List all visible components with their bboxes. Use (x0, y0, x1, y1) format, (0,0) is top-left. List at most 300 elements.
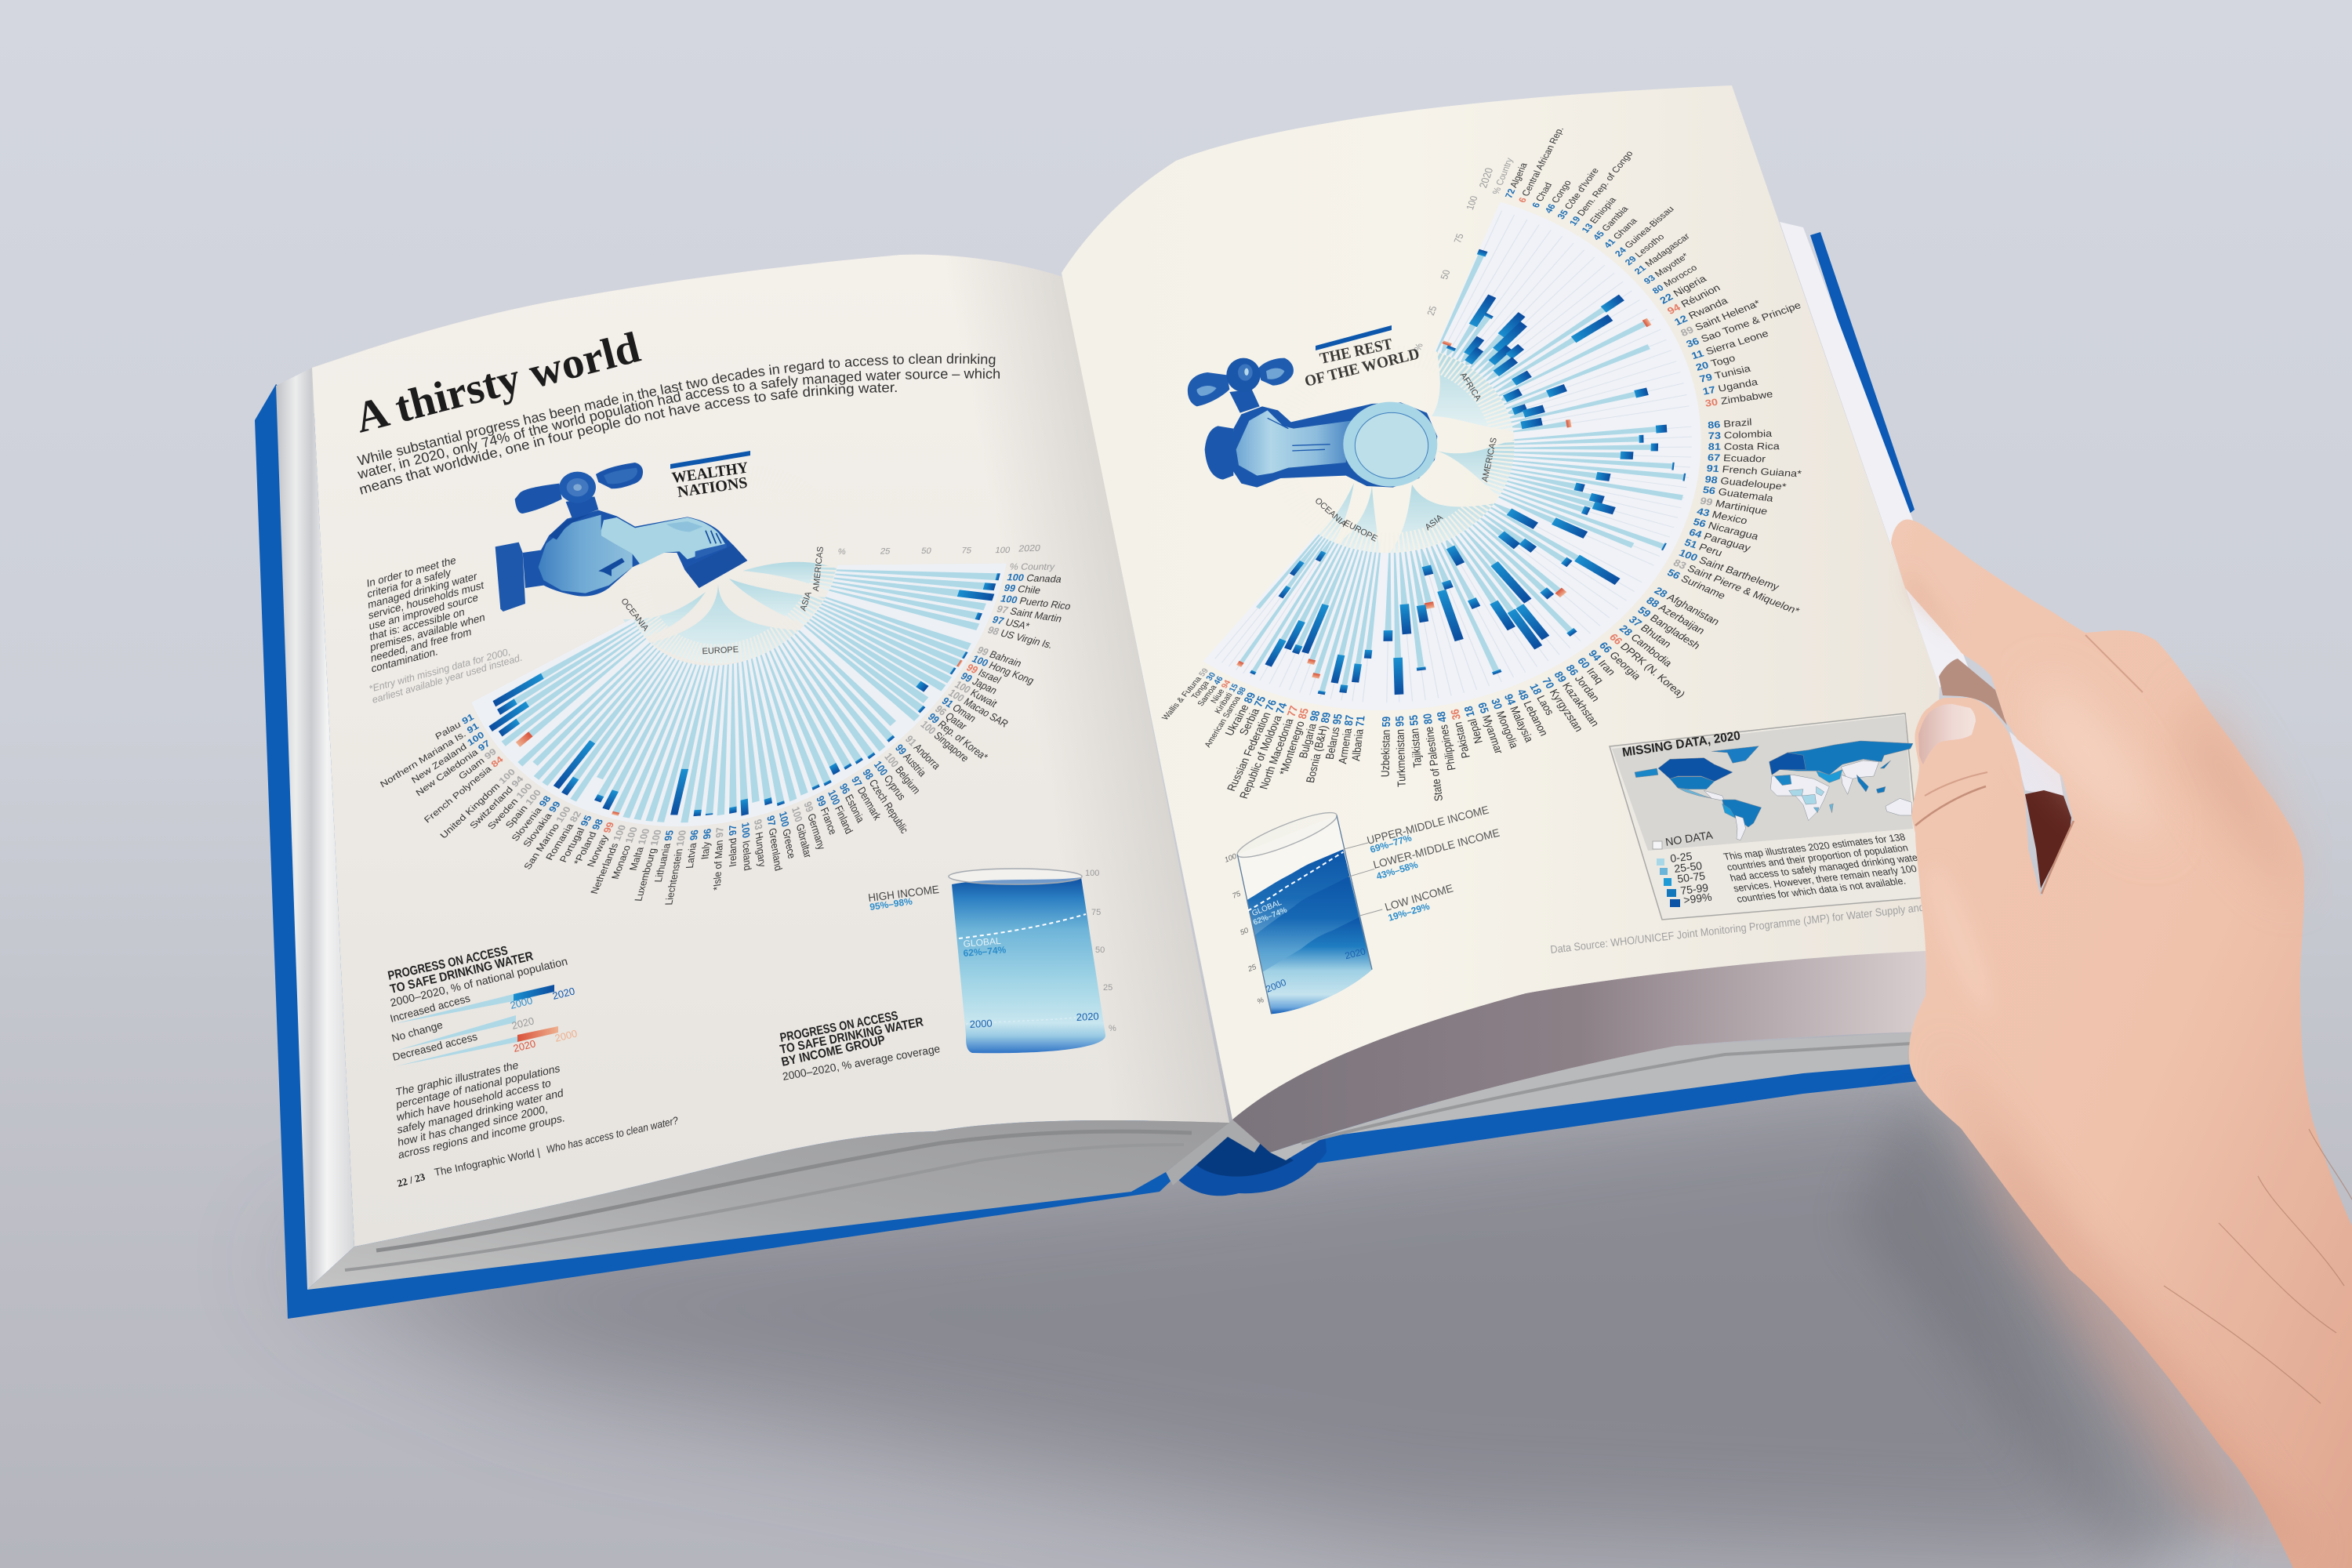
bars: Africa: 20 Togo (1694, 352, 1737, 373)
region labels (1313, 371, 1499, 544)
bars: Americas (816, 554, 1080, 661)
income labels: 43%–58% (1375, 859, 1420, 882)
bars: Asia: 65 Myanmar (1475, 701, 1505, 756)
bars: Africa: 6 Central African Rep. (1517, 125, 1566, 204)
bars: Asia: Turkmenistan 95 (1393, 715, 1408, 787)
left page gutter shade (312, 255, 1229, 1247)
branch tents (623, 562, 837, 663)
map note: had access to safely managed drinking water (1729, 851, 1922, 884)
left page stack edge (276, 368, 354, 1290)
bars: Americas: 100 Puerto Rico (999, 593, 1073, 612)
heading: progress by income group: BY INCOME GROUP (780, 1033, 887, 1069)
bars: Asia: 88 Azerbaijan (1644, 595, 1708, 637)
bars: Americas: 86 Brazil (1708, 416, 1752, 430)
intro text: While substantial progress has been made in the last two decades in regard to access to clean drinking (357, 353, 996, 466)
branch tents (1319, 352, 1515, 553)
bars: Europe: Sweden 100 (486, 782, 535, 831)
glass chart: high income: 75 (1091, 908, 1101, 917)
bars: Americas: 43 Mexico (1696, 506, 1749, 526)
faucet mouth (1343, 402, 1437, 487)
bars: Europe: 96 Estonia (837, 782, 866, 826)
bars: Europe: Serbia 75 (1237, 694, 1269, 737)
gap between thumb and palm (2025, 790, 2071, 888)
map legend: >99% (1682, 891, 1712, 906)
right page (1062, 85, 1940, 1120)
heading: the rest of the world: OF THE WORLD (1303, 345, 1421, 390)
legend: progress on access: 2020 (551, 985, 576, 1002)
bars: Asia: 48 Lebanon (1515, 688, 1551, 738)
income labels: UPPER-MIDDLE INCOME (1366, 803, 1490, 847)
region labels: OCEANIA (619, 597, 651, 633)
glass chart: income layers: 2020 (1344, 946, 1367, 961)
bars: Europe: Liechtenstein 100 (663, 830, 688, 906)
bars: Oceania: Northern Mariana Is. 91 (379, 720, 481, 789)
glass chart: high income: 62%–74% (963, 944, 1007, 959)
bars: Europe: Portugal 95 (557, 814, 594, 864)
thumbnail (1918, 704, 1976, 764)
bars: Europe: *Isle of Man 97 (711, 826, 726, 891)
bars: Europe: Albania 71 (1349, 715, 1367, 761)
wrist hair (2164, 1129, 2352, 1403)
legend: progress on access: 2020 (512, 1037, 537, 1054)
bars: Africa: 93 Mayotte* (1642, 252, 1691, 286)
bars: Europe: Switzerland 94 (468, 774, 525, 831)
bars: Americas: 83 Saint Pierre & Miquelon* (1671, 557, 1802, 616)
bars: Asia: 86 Jordan (1563, 662, 1602, 703)
map note: This map illustrates 2020 estimates for 138 (1722, 832, 1907, 862)
bars: Asia: Uzbekistan 59 (1379, 717, 1392, 777)
bars: Asia: 99 Rep. of Korea* (925, 711, 990, 763)
map legend: 25-50 (1673, 859, 1703, 875)
bars: Europe: Russian Federation 76 (1225, 699, 1279, 793)
bars: Americas: 97 USA* (991, 614, 1031, 632)
axis labels (833, 538, 1061, 582)
map note: countries for which data is not available. (1735, 875, 1907, 905)
map note: services. However, there remain nearly 100 (1732, 863, 1918, 894)
bars: Oceania: Palau 91 (434, 712, 475, 742)
bars: Asia: 99 Japan (959, 670, 1000, 696)
bars: Europe: 97 Denmark (849, 775, 884, 822)
bars: Oceania: New Caledonia 97 (414, 739, 492, 798)
bars: Oceania: Guam 99 (457, 746, 499, 782)
bars: Asia: Pakistan 36 (1448, 708, 1472, 759)
white page strip right (1780, 222, 1968, 688)
book cast shadow (267, 1051, 2164, 1568)
bars: Europe: United Kingdom 100 (438, 767, 517, 840)
bars: Europe: San Marino 100 (522, 805, 573, 871)
bars: Americas: 99 Chile (1003, 583, 1042, 596)
text: criteria note: needed, and free from (371, 626, 472, 664)
strand stripes (624, 474, 842, 659)
bars: Europe (1214, 535, 1392, 808)
bars: Oceania: French Polynesia 84 (423, 754, 505, 825)
glass chart: high income: HIGH INCOME (867, 883, 940, 904)
bars: Europe: 91 Andorra (903, 733, 943, 772)
glass chart: high income: 2000 (969, 1018, 993, 1030)
heading: progress by income group (779, 1009, 942, 1083)
fan bars in page plane (1150, 104, 1864, 837)
left page (312, 255, 1229, 1247)
axis labels (1411, 152, 1515, 357)
bars: Asia: 30 Mongolia (1489, 697, 1521, 750)
axis labels: 25 (880, 547, 891, 556)
footnote: *Entry with missing data for 2000, (368, 646, 512, 695)
region labels: AFRICA (1458, 371, 1483, 403)
bars: Americas: 98 US Virgin Is. (985, 625, 1054, 651)
bars: Oceania: Niue 94 (1210, 679, 1233, 705)
legend: progress on access: 2000 (509, 994, 534, 1011)
glass chart: income layers: 62%–74% (1252, 906, 1288, 927)
bars: Asia: Philippines 48 (1435, 710, 1458, 771)
text: graphic description: percentage of national populations (396, 1062, 561, 1111)
bars: Europe: Spain 100 (503, 788, 543, 830)
legend: progress on access: 2000–2020, % of national population (389, 955, 568, 1009)
bars: Asia: Nepal 18 (1461, 705, 1485, 745)
bars: Europe: Italy 96 (699, 828, 713, 860)
axis labels: % (837, 547, 847, 557)
bars: Europe: *Poland 98 (572, 818, 605, 866)
heading: progress by income group: PROGRESS ON ACCESS (779, 1009, 899, 1045)
glass chart: high income: GLOBAL (963, 935, 1001, 949)
glass chart: income layers: 2000 (1265, 977, 1288, 995)
axis labels: % Country (1491, 157, 1515, 195)
region labels (619, 546, 826, 656)
glass chart: income layers (1223, 805, 1382, 1014)
region labels: EUROPE (702, 645, 739, 656)
map legend: 0-25 (1669, 850, 1693, 865)
bars: Asia: 60 Iraq (1575, 655, 1606, 685)
middle finger (1939, 659, 2007, 725)
faucet: wealthy nations (495, 463, 747, 612)
bars: Asia: 18 Laos (1527, 682, 1557, 717)
panel behind bars (1198, 186, 1733, 731)
glass chart: income layers: % (1256, 996, 1265, 1005)
bars: Asia (776, 583, 1051, 772)
heading: the rest of the world: THE REST (1318, 336, 1395, 368)
income labels: 69%–77% (1369, 832, 1414, 855)
glass chart: high income: % (1109, 1024, 1116, 1033)
axis labels: 50 (1438, 268, 1453, 281)
bars: Africa: 94 Réunion (1665, 282, 1722, 317)
light gap between fingers (2009, 731, 2063, 797)
bars: Oceania: Wallis & Futuna 59 (1160, 667, 1210, 722)
region labels: OCEANIA (1313, 496, 1348, 529)
bars: Africa: 22 Nigeria (1657, 273, 1709, 306)
bars: Africa: 6 Chad (1531, 181, 1555, 209)
bars: Europe: Belarus 95 (1323, 713, 1345, 760)
income labels (1366, 803, 1501, 924)
glass chart: income layers: GLOBAL (1250, 898, 1283, 918)
bars: Oceania: Kiribati 15 (1214, 682, 1240, 715)
bars: Europe: Republic of Moldova 74 (1237, 701, 1290, 800)
bars: Europe: 100 Iceland (739, 821, 753, 872)
axis labels: 75 (960, 546, 972, 555)
knuckle creases (1915, 786, 2074, 894)
bars: Europe: 98 Czech Republic (860, 767, 910, 836)
left fan chart: wealthy nations (356, 463, 1095, 919)
bars: Asia: 99 Bahrain (975, 644, 1024, 670)
glass chart: income layers: 75 (1231, 889, 1242, 900)
bars: Africa: 19 Dem. Rep. of Congo (1568, 150, 1635, 227)
glass chart: income layers: 50 (1239, 926, 1250, 937)
bars: Asia: 28 Cambodia (1617, 622, 1675, 669)
bars: Europe: Netherlands 100 (589, 824, 628, 895)
region labels: AMERICAS (811, 546, 826, 592)
bars: Africa: 30 Zimbabwe (1704, 388, 1773, 408)
axis labels: 75 (1451, 232, 1466, 245)
bars: Africa: 89 Saint Helena* (1679, 298, 1762, 339)
bars: Asia: 100 Singapore (918, 719, 971, 764)
legend: progress on access (387, 944, 579, 1066)
bars: Africa (1421, 119, 1825, 456)
faucet: rest of the world (1188, 358, 1437, 488)
heading: the rest of the world (1303, 325, 1421, 390)
text: graphic description: which have household access to (396, 1076, 551, 1123)
bars: Europe: Romania 82 (544, 810, 583, 862)
text: graphic description: The graphic illustrates the (395, 1058, 519, 1098)
bars: Africa: 24 Guinea-Bissau (1613, 205, 1676, 259)
axis labels: 2020 (1018, 543, 1041, 554)
bars: Europe: 100 Finland (826, 788, 855, 836)
bars: Asia: 100 Macao SAR (946, 688, 1011, 730)
text: criteria note: premises, available when (370, 611, 485, 654)
bars: Asia: 100 Hong Kong (970, 653, 1036, 687)
spine (1166, 1120, 1327, 1196)
heading: wealthy nations: NATIONS (677, 474, 749, 501)
bars: Americas: 98 Guadeloupe* (1704, 474, 1788, 492)
intro text: water, in 2020, only 74% of the world population had access to a safely managed water source – which (358, 368, 1000, 478)
bars: Europe: 99 Germany (801, 800, 827, 852)
bars: Africa: 12 Rwanda (1672, 295, 1730, 328)
bars: Americas: 56 Suriname (1665, 567, 1728, 601)
bars: Europe: Bosnia (B&H) 89 (1304, 712, 1334, 784)
bars: Asia: 70 Kyrgyzstan (1540, 676, 1585, 734)
fan bars in page plane (356, 463, 1095, 919)
bars: Asia: State of Palestine 80 (1421, 713, 1445, 802)
bars: Europe: Ireland 97 (728, 824, 739, 868)
text: criteria note: contamination. (371, 645, 438, 675)
bars: Europe: Monaco 100 (609, 826, 640, 880)
map legend: 50-75 (1676, 869, 1706, 885)
bars: Europe: Bulgaria 98 (1297, 710, 1323, 759)
bars: Oceania: New Zealand 100 (410, 730, 486, 786)
glass chart: high income: 25 (1103, 983, 1112, 993)
heading: wealthy nations (670, 451, 750, 501)
bars: Asia: 37 Bhutan (1626, 614, 1674, 650)
axis labels: 100 (1464, 194, 1480, 211)
bars: Africa: 11 Sierra Leone (1690, 328, 1770, 361)
legend: progress on access: Increased access (389, 993, 472, 1025)
book cover right board (1286, 1051, 1926, 1176)
text: graphic description: safely managed drinking water and (397, 1086, 564, 1136)
legend: progress on access: No change (390, 1019, 444, 1044)
region labels: ASIA (799, 590, 814, 612)
page footer: The Infographic World | (434, 1146, 541, 1178)
heading: wealthy nations: WEALTHY (671, 459, 750, 487)
bars: Asia: 100 Kuwait (953, 679, 1000, 710)
text: criteria note: criteria for a safely (367, 566, 452, 601)
book cover left board (255, 384, 1176, 1319)
glass chart: income layers: 100 (1223, 851, 1238, 864)
bars: Europe: Armenia 87 (1336, 714, 1356, 764)
bars: Americas: 51 Peru (1682, 537, 1724, 558)
bars: Europe: 93 Hungary (752, 818, 768, 869)
axis labels: 100 (994, 546, 1011, 555)
heading: progress by income group: 2000–2020, % average coverage (782, 1042, 942, 1083)
bars: Oceania: Tonga 30 (1190, 671, 1218, 701)
right page bottom stack (1232, 951, 1926, 1160)
bars: Asia: 59 Bangladesh (1635, 604, 1703, 652)
bars: Americas: 100 Canada (1006, 572, 1064, 585)
bars: Asia: 91 Oman (939, 695, 978, 724)
bars: Asia: Tajikistan 55 (1407, 714, 1424, 768)
bars: Europe: 100 Gibraltar (789, 805, 814, 860)
bars: Europe: North Macedonia 77 (1257, 705, 1301, 790)
legend: progress on access: 2020 (510, 1014, 535, 1032)
right fan chart: rest of the world (1150, 104, 1864, 837)
bars: Africa: 21 Madagascar (1633, 232, 1692, 277)
bars: Americas: 99 Martinique (1699, 495, 1769, 517)
bars: Asia: 89 Kazakhstan (1552, 670, 1602, 728)
axis labels: 25 (1425, 305, 1439, 317)
region labels: AMERICAS (1480, 437, 1499, 483)
bars: Americas: 81 Costa Rica (1708, 441, 1780, 452)
text: criteria note: service, households must (368, 579, 485, 622)
bars: Americas: 97 Saint Martin (995, 604, 1063, 625)
left page bottom stack (307, 1120, 1229, 1290)
bars: Americas: 56 Nicaragua (1692, 516, 1760, 542)
glass chart: high income: 95%–98% (869, 895, 913, 913)
page footer (396, 1114, 680, 1189)
bars: Europe: 100 Belgium (882, 751, 923, 797)
heading: A thirsty world: A thirsty world (350, 323, 645, 443)
text: criteria note: use an improved source (368, 591, 478, 632)
bars: Europe: Slovakia 99 (521, 800, 563, 848)
page footer: Who has access to clean water? (545, 1114, 680, 1156)
cover strip top right (1810, 232, 1915, 519)
bars: Asia: 66 Georgia (1597, 640, 1644, 682)
text: graphic description: across regions and income groups. (398, 1111, 565, 1161)
map legend (1653, 829, 1714, 907)
bars: Europe: 99 France (814, 794, 839, 837)
panel behind bars (449, 557, 1007, 837)
map legend: NO DATA (1664, 829, 1714, 848)
glass chart: high income: 2020 (1076, 1011, 1099, 1023)
bars: Americas: 67 Ecuador (1708, 452, 1766, 464)
legend: progress on access: Decreased access (391, 1030, 479, 1063)
axis labels: 2020 (1476, 166, 1496, 189)
bars: Oceania: Samoa 46 (1196, 675, 1225, 708)
bars: Asia: 94 Iran (1586, 648, 1618, 677)
bars: Africa: 13 Ethiopia (1581, 196, 1619, 234)
map legend: 75-99 (1679, 881, 1709, 897)
bars: Americas: 100 Saint Barthelemy (1677, 547, 1781, 593)
bars: Africa: 80 Morocco (1651, 263, 1699, 296)
bars: Europe: Slovenia 98 (510, 794, 553, 843)
bars: Americas: 64 Paraguay (1687, 527, 1752, 554)
bars: Asia: 66 DPRK (N. Korea) (1607, 631, 1688, 699)
bars: Europe: Norway 99 (585, 821, 616, 868)
map note: countries and their proportion of population (1726, 842, 1910, 873)
legend: progress on access: TO SAFE DRINKING WATER (389, 949, 535, 996)
bars: Oceania: American Samoa 98 (1203, 686, 1248, 749)
bars: Americas: 91 French Guiana* (1706, 463, 1802, 479)
text: criteria note: that is: accessible on (369, 606, 465, 643)
glass chart: income layers: 25 (1246, 963, 1258, 974)
bars: Europe: Lithuania 95 (652, 830, 676, 883)
legend: progress on access: PROGRESS ON ACCESS (387, 944, 510, 983)
bars: Europe: 100 Greece (777, 810, 797, 860)
glass chart: high income: 100 (1085, 869, 1099, 878)
hand shading (1929, 1019, 2321, 1560)
bars: Europe: Malta 100 (627, 828, 652, 871)
bars: Americas (1483, 400, 1827, 617)
text: criteria note: In order to meet the (366, 554, 456, 590)
bars: Europe: Luxembourg 100 (633, 829, 664, 902)
bars: Africa: 36 Sao Tome & Principe (1685, 299, 1802, 350)
bars: Asia: 94 Malaysia (1501, 692, 1536, 744)
income labels: LOW INCOME (1383, 881, 1454, 913)
bars: Africa: 35 Côte d'Ivoire (1556, 167, 1601, 221)
bars: Asia: 28 Afghanistan (1652, 585, 1722, 627)
map panel: missing data (1610, 713, 1929, 920)
bars: Africa: 17 Uganda (1701, 376, 1759, 397)
bars: Oceania (1157, 524, 1340, 756)
region labels: ASIA (1424, 513, 1445, 532)
intro text: means that worldwide, one in four people do not have access to safe drinking water. (359, 383, 897, 495)
bars: Asia: 99 Israel (964, 662, 1004, 686)
hand shadow on table (1850, 1090, 2234, 1560)
heading: progress by income group: TO SAFE DRINKING WATER (779, 1015, 925, 1057)
glass chart: high income: 50 (1095, 946, 1105, 955)
hand holding the book (1850, 520, 2352, 1568)
region labels: EUROPE (1342, 518, 1379, 544)
axis labels: % (1411, 342, 1425, 352)
bars: Oceania (371, 617, 653, 827)
page footer: 22 / 23 (396, 1171, 426, 1189)
axis labels: 50 (920, 546, 932, 556)
bars: Europe (425, 619, 967, 916)
bars: Africa: 72 Algeria (1504, 162, 1530, 199)
bars: Europe: Latvia 96 (684, 829, 701, 869)
text: graphic description: how it has changed since 2000, (397, 1102, 548, 1149)
bars: Asia (1350, 492, 1736, 820)
bars: Americas: 73 Colombia (1708, 428, 1773, 441)
bars: Africa: 29 Lesotho (1624, 233, 1667, 267)
strand stripes (1269, 348, 1515, 550)
bars: Europe: 100 Cyprus (872, 759, 908, 802)
income labels: LOWER-MIDDLE INCOME (1372, 826, 1501, 871)
text: criteria note: managed drinking water (368, 570, 477, 611)
bars: Europe: Ukraine 89 (1223, 691, 1258, 738)
bars: Africa: 45 Gambia (1592, 205, 1631, 242)
world map (1635, 741, 1913, 840)
legend: progress on access: 2000 (554, 1027, 579, 1044)
bars: Europe: 97 Greenland (764, 814, 784, 873)
glass chart: high income (867, 869, 1116, 1053)
bars: Africa: 46 Congo (1544, 179, 1573, 215)
bars: Europe: 99 Austria (893, 742, 929, 779)
map panel: missing data: MISSING DATA, 2020 (1621, 729, 1741, 760)
footnote: earliest available year used instead. (371, 652, 524, 706)
bars: Americas: 56 Guatemala (1702, 485, 1775, 504)
bars: Europe: *Montenegro 85 (1277, 707, 1312, 776)
data source: Data Source: WHO/UNICEF Joint Monitoring Programme (JMP) for Water Supply and Sanitation (1550, 895, 1972, 956)
palm and fingers (1891, 520, 2352, 1568)
bars: Africa: 79 Tunisia (1698, 363, 1752, 385)
income labels: 19%–29% (1387, 901, 1432, 924)
axis labels: % Country (1009, 561, 1057, 572)
